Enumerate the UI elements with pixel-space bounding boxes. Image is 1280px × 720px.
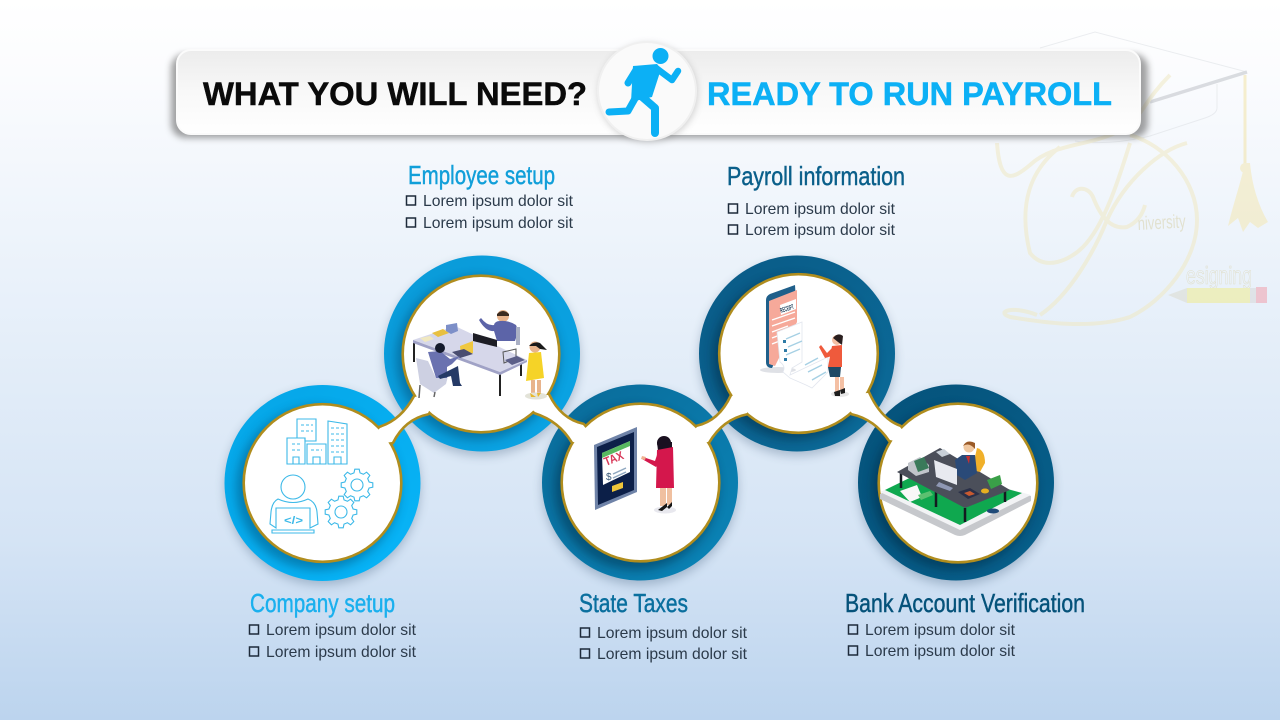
text block: employee setup: Lorem ipsum dolor sit	[423, 215, 574, 232]
text block: state taxes	[579, 588, 748, 663]
illustration: employee setup desk scene	[413, 310, 547, 400]
heading: employee setup: Employee setup	[408, 160, 555, 190]
text block: payroll information: Lorem ipsum dolor sit	[745, 201, 896, 218]
text block: payroll information: Lorem ipsum dolor sit	[745, 222, 896, 239]
heading: what you will need: WHAT YOU WILL NEED?	[203, 76, 587, 112]
illustration: tax tablet and woman: $	[606, 472, 612, 483]
text block: bank account verification: Lorem ipsum dolor sit	[865, 643, 1016, 660]
text block: payroll information	[727, 161, 905, 239]
illustration: payroll receipt on phone and woman	[760, 285, 849, 397]
illustration: tax tablet and woman	[594, 427, 676, 514]
illustration: payroll receipt on phone and woman: RECEIPT	[779, 304, 795, 315]
text block: employee setup: Lorem ipsum dolor sit	[423, 193, 574, 210]
text block: company setup: Lorem ipsum dolor sit	[266, 622, 417, 639]
white chain of connected circles	[245, 276, 1036, 561]
heading: payroll information: Payroll information	[727, 161, 905, 191]
heading: bank account verification: Bank Account Verification	[845, 588, 1085, 618]
gold outline of connected circles	[245, 276, 1036, 561]
text block: bank account verification: Lorem ipsum dolor sit	[865, 622, 1016, 639]
watermark: graduation cap and script logo	[997, 32, 1268, 324]
icon: company buildings, developer and gears	[270, 419, 373, 533]
heading: company setup: Company setup	[250, 588, 395, 618]
text block: state taxes: Lorem ipsum dolor sit	[597, 646, 748, 663]
heading: ready to run payroll: READY TO RUN PAYROLL	[707, 76, 1112, 112]
icon: company buildings, developer and gears: </>	[284, 515, 303, 527]
title banner	[171, 42, 1148, 143]
illustration: tax tablet and woman: TAX	[602, 448, 626, 469]
text block: state taxes: Lorem ipsum dolor sit	[597, 625, 748, 642]
illustration: bank desk on tablet	[880, 442, 1031, 536]
watermark: graduation cap and script logo: esigning	[1186, 262, 1252, 290]
text block: company setup	[250, 588, 417, 661]
text block: bank account verification	[845, 588, 1085, 660]
text block: employee setup	[406, 160, 574, 232]
watermark: graduation cap and script logo: niversity	[1137, 211, 1187, 235]
icon: running person	[598, 42, 698, 143]
text block: company setup: Lorem ipsum dolor sit	[266, 644, 417, 661]
ring shadows and outer rings	[224, 256, 1054, 585]
heading: state taxes: State Taxes	[579, 588, 688, 618]
